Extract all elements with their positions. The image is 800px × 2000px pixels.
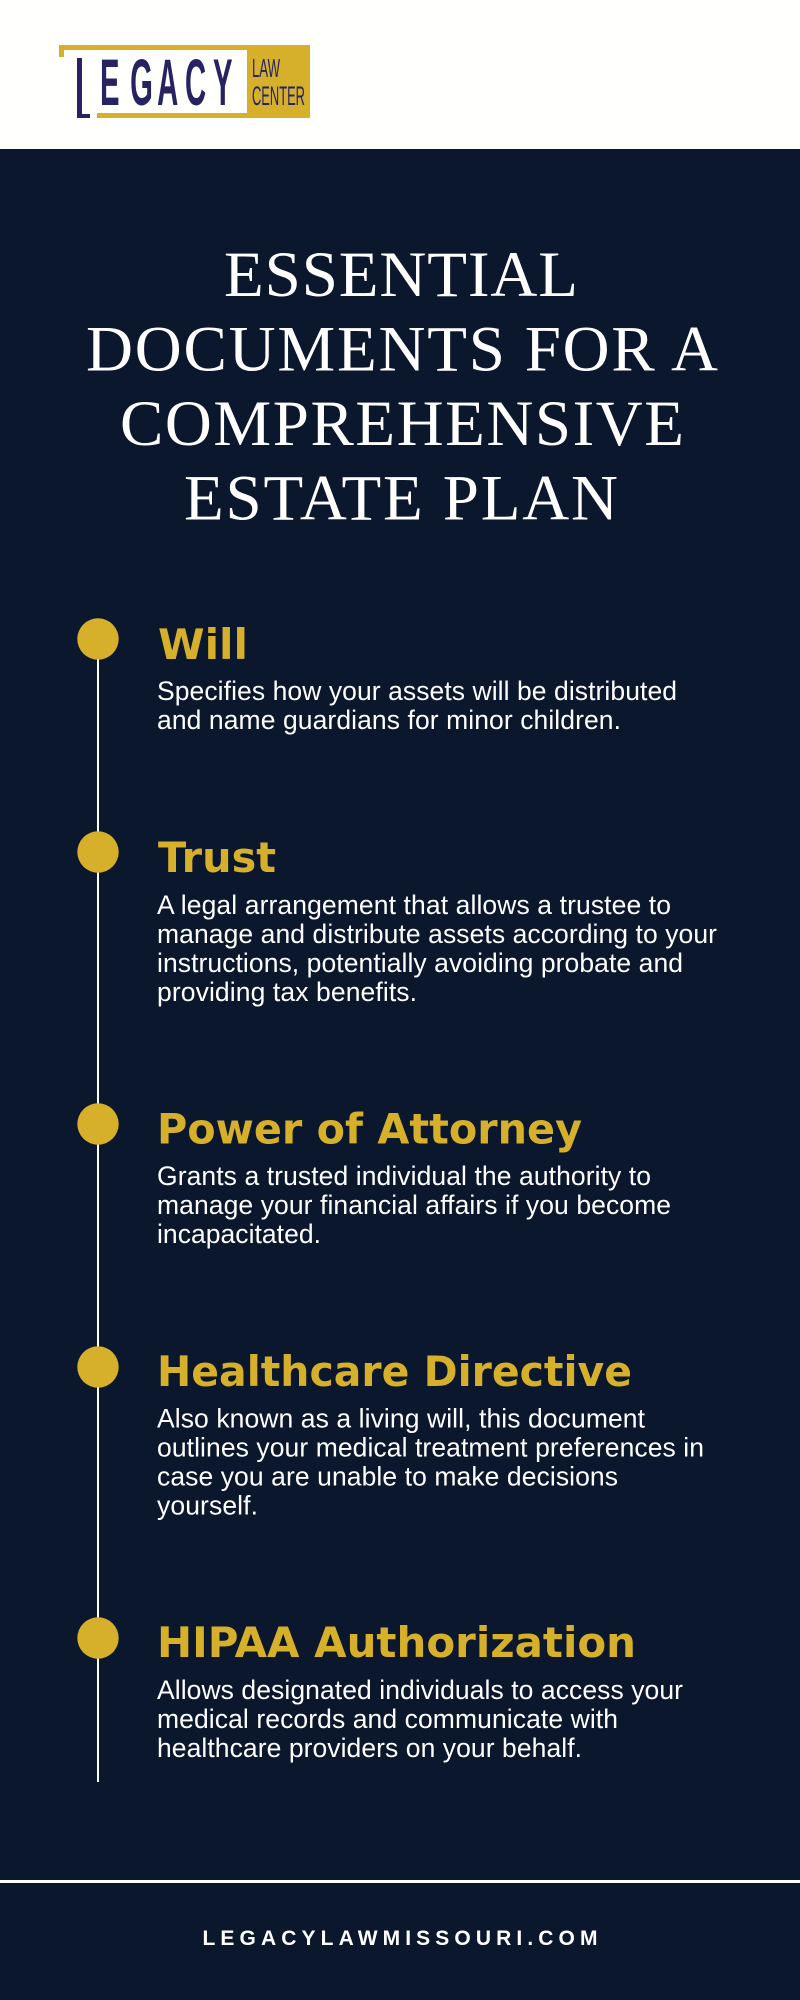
item: HIPAA Authorization: healthcare providers on your behalf. — [157, 1733, 582, 1763]
item: Power of Attorney: Grants a trusted individual the authority to — [157, 1161, 651, 1191]
item: Power of Attorney: manage your financial affairs if you become — [157, 1190, 671, 1220]
item: Power of Attorney: incapacitated. — [157, 1219, 321, 1249]
title: ESSENTIAL — [224, 239, 578, 311]
item: Healthcare Directive: yourself. — [157, 1490, 258, 1520]
item: Healthcare Directive: outlines your medical treatment preferences in — [157, 1432, 704, 1462]
item: Trust: providing tax benefits. — [157, 977, 417, 1007]
item: Will: Specifies how your assets will be distributed — [157, 676, 677, 706]
logo: LAW — [252, 53, 280, 83]
item: Trust — [77, 831, 717, 1007]
timeline line — [97, 640, 99, 1782]
item: Trust: instructions, potentially avoiding probate and — [157, 948, 683, 978]
item: Trust: A legal arrangement that allows a trustee to — [157, 890, 671, 920]
item: HIPAA Authorization: HIPAA Authorization — [157, 1618, 636, 1667]
title — [86, 239, 718, 534]
title: COMPREHENSIVE — [120, 388, 684, 460]
title: DOCUMENTS FOR A — [86, 314, 718, 386]
title: ESTATE PLAN — [184, 462, 618, 534]
header band — [0, 0, 800, 149]
item: Will — [77, 618, 677, 735]
logo: EGACY — [100, 45, 232, 119]
item: HIPAA Authorization: Allows designated individuals to access your — [157, 1675, 683, 1705]
item: Healthcare Directive: Also known as a living will, this document — [157, 1404, 646, 1434]
logo: CENTER — [252, 81, 305, 111]
item: Healthcare Directive: case you are unable to make decisions — [157, 1462, 618, 1492]
item: Trust: manage and distribute assets according to your — [157, 919, 717, 949]
item: Healthcare Directive: Healthcare Directive — [157, 1347, 632, 1396]
item: Healthcare Directive — [77, 1346, 704, 1520]
item: Power of Attorney: Power of Attorney — [157, 1104, 582, 1154]
item: Will: and name guardians for minor children. — [157, 705, 621, 735]
item: Power of Attorney — [77, 1103, 671, 1249]
logo — [59, 45, 310, 119]
item: Will: Will — [158, 620, 248, 669]
footer url: LEGACYLAWMISSOURI.COM — [202, 1927, 598, 1950]
item: HIPAA Authorization — [77, 1617, 683, 1763]
item: Trust: Trust — [158, 833, 276, 882]
item: HIPAA Authorization: medical records and communicate with — [157, 1704, 618, 1734]
footer divider — [0, 1880, 800, 1883]
